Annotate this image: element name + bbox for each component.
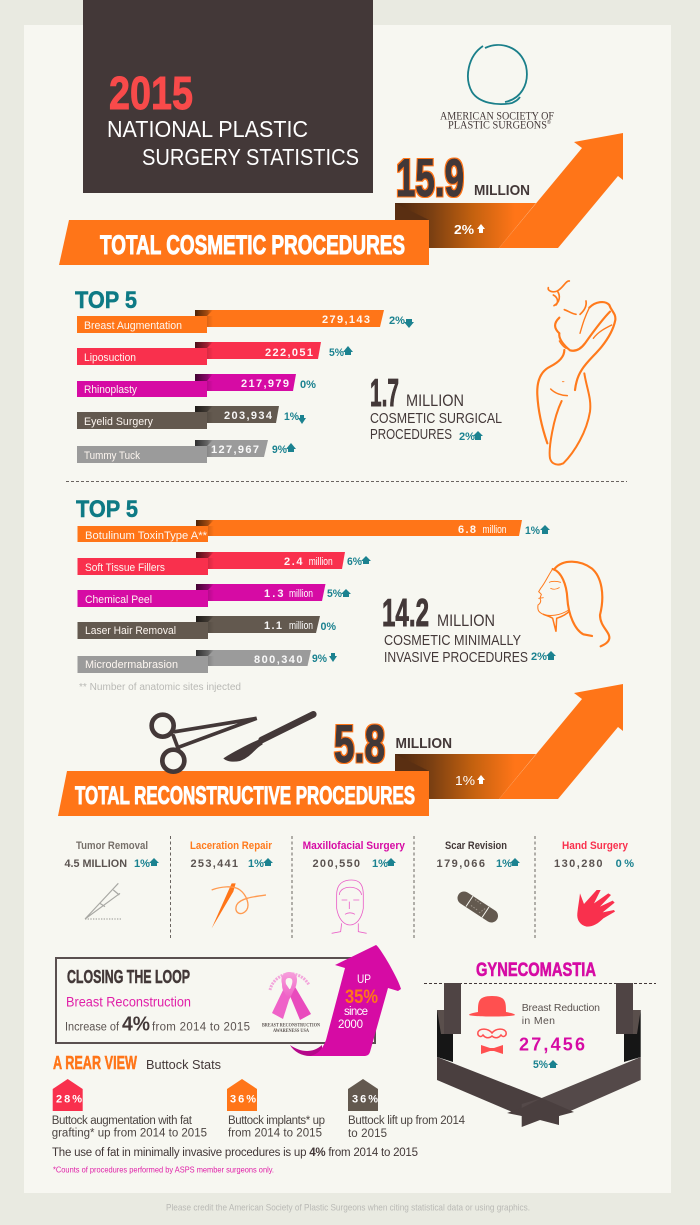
title block: SURGERY STATISTICS xyxy=(142,144,359,170)
total reconstructive arrow and banner: TOTAL RECONSTRUCTIVE PROCEDURES xyxy=(75,782,415,810)
stat: buttock implants: Buttock implants* up xyxy=(228,1115,325,1127)
icon: scalpel outline xyxy=(85,883,122,919)
bar: liposuction: Liposuction xyxy=(84,352,136,364)
stat: buttock implants xyxy=(227,1079,325,1140)
icon: face outline xyxy=(332,880,367,933)
column: maxillofacial surgery: 200,550 xyxy=(312,858,360,870)
icon: red hand xyxy=(577,890,615,927)
bar: chemical peel: 1.3 xyxy=(264,588,284,600)
heading: a rear view: Buttock Stats xyxy=(146,1057,221,1072)
stat: 14.2 million minimally invasive: INVASIVE PROCEDURES xyxy=(384,649,528,666)
column: scar revision: 1% xyxy=(496,858,512,870)
column: maxillofacial surgery: Maxillofacial Surgery xyxy=(303,840,406,852)
bar: soft tissue fillers: Soft Tissue Fillers xyxy=(85,562,165,574)
stat: 1.7 million surgical xyxy=(370,372,502,443)
logo: American Society of Plastic Surgeons: AMERICAN SOCIETY OF xyxy=(440,110,554,122)
stat: buttock lift: to 2015 xyxy=(348,1128,387,1140)
total reconstructive arrow and banner: 5.8 xyxy=(334,715,385,774)
stat: 1.7 million surgical: COSMETIC SURGICAL xyxy=(370,410,502,427)
column: hand surgery: 130,280 xyxy=(554,858,602,870)
footnote: anatomic sites: ** Number of anatomic sites injected xyxy=(79,682,241,693)
column: laceration repair: 1% xyxy=(248,858,264,870)
panel: closing the loop: CLOSING THE LOOP xyxy=(67,967,190,987)
panel: gynecomastia: 5% xyxy=(533,1059,548,1071)
bar: laser hair removal xyxy=(78,616,336,639)
bar: laser hair removal: 0% xyxy=(320,621,336,633)
bar: eyelid surgery: 203,934 xyxy=(224,410,273,422)
bar: eyelid surgery: 1% xyxy=(284,411,299,423)
column: maxillofacial surgery: 1% xyxy=(372,858,388,870)
stat: 14.2 million minimally invasive xyxy=(382,592,556,666)
column: hand surgery: Hand Surgery xyxy=(562,840,629,852)
column: maxillofacial surgery xyxy=(303,840,406,933)
logo: American Society of Plastic Surgeons xyxy=(440,45,554,132)
icon: scalpel xyxy=(223,714,313,762)
bar: liposuction: 5% xyxy=(329,347,344,359)
stat: 1.7 million surgical: PROCEDURES xyxy=(370,426,452,443)
column: tumor removal: 1% xyxy=(134,858,150,870)
total reconstructive arrow and banner: MILLION xyxy=(396,735,452,752)
bar: eyelid surgery xyxy=(77,406,306,429)
column: hand surgery xyxy=(554,840,634,927)
stat: 1.7 million surgical: 2% xyxy=(459,431,475,443)
panel: closing the loop: Increase of xyxy=(65,1022,120,1034)
panel: gynecomastia xyxy=(424,960,656,1127)
panel: gynecomastia: 27,456 xyxy=(519,1035,585,1055)
total cosmetic arrow and banner: TOTAL COSMETIC PROCEDURES xyxy=(100,230,405,260)
stat: buttock implants: 36% xyxy=(230,1094,256,1106)
bar: tummy tuck: 9% xyxy=(272,444,287,456)
text: use of fat: The use of fat in minimally invasive procedures is up 4% from 2014 to 2015 xyxy=(52,1147,418,1159)
stat: buttock augmentation: grafting* up from 2014 to 2015 xyxy=(52,1128,207,1140)
bar: eyelid surgery: Eyelid Surgery xyxy=(84,416,153,428)
column: laceration repair xyxy=(190,840,273,928)
heading: top 5 minimally invasive: TOP 5 xyxy=(76,496,138,523)
icon: bow tie xyxy=(481,1045,503,1054)
stat: 1.7 million surgical: 1.7 xyxy=(370,372,399,415)
column: tumor removal xyxy=(64,840,159,919)
panel: gynecomastia: GYNECOMASTIA xyxy=(476,960,596,981)
pink arrow: up 35% since 2000: UP xyxy=(357,972,371,986)
panel: closing the loop: from 2014 to 2015 xyxy=(152,1022,250,1034)
bar: microdermabrasion: Microdermabrasion xyxy=(85,659,178,671)
total cosmetic arrow and banner: 15.9 xyxy=(396,149,464,208)
pink arrow: up 35% since 2000: 35% xyxy=(345,987,378,1008)
bar: rhinoplasty: 217,979 xyxy=(241,378,289,390)
bar: botulinum toxin: 6.8 xyxy=(458,524,476,536)
bar: laser hair removal: 1.1 xyxy=(264,620,282,632)
bar: rhinoplasty: Rhinoplasty xyxy=(84,384,137,396)
title block: NATIONAL PLASTIC xyxy=(107,116,308,142)
stat: 14.2 million minimally invasive: 14.2 xyxy=(382,592,429,635)
stat: 1.7 million surgical: MILLION xyxy=(406,391,464,410)
bar: laser hair removal: million xyxy=(289,620,313,632)
illustration: female face outline xyxy=(538,562,609,646)
panel: closing the loop: BREAST RECONSTRUCTION xyxy=(262,1024,320,1029)
footnote: counts of procedures: *Counts of procedures performed by ASPS member surgeons only. xyxy=(53,1165,274,1175)
stat: buttock augmentation: Buttock augmentation with fat xyxy=(52,1115,193,1127)
pink arrow: up 35% since 2000 xyxy=(290,945,401,1056)
bar: soft tissue fillers: million xyxy=(309,556,333,568)
bar: botulinum toxin: million xyxy=(482,524,506,536)
icon: needle and thread xyxy=(212,883,266,928)
icon: red hat xyxy=(469,996,515,1016)
bar: breast augmentation: 279,143 xyxy=(322,314,370,326)
bar: liposuction: 222,051 xyxy=(265,347,313,359)
divider xyxy=(66,480,627,482)
column: laceration repair: 253,441 xyxy=(190,858,238,870)
bar: liposuction xyxy=(77,342,353,365)
panel: closing the loop: Breast Reconstruction xyxy=(66,994,191,1010)
total reconstructive arrow and banner xyxy=(58,684,623,816)
total cosmetic arrow and banner: MILLION xyxy=(474,182,530,199)
stat: 14.2 million minimally invasive: 2% xyxy=(531,651,547,663)
total reconstructive arrow and banner: 1% xyxy=(455,773,475,788)
icon: hemostat scissors xyxy=(152,715,257,772)
heading: a rear view: A REAR VIEW xyxy=(53,1053,137,1073)
ribbon frame xyxy=(437,983,641,1127)
bar: microdermabrasion: 9% xyxy=(312,653,327,665)
total cosmetic arrow and banner xyxy=(59,133,623,265)
credit line: Please credit the American Society of Plastic Surgeons when citing statistical data or using graphics. xyxy=(166,1202,530,1214)
bar: botulinum toxin xyxy=(78,520,550,542)
illustration: female body outline xyxy=(537,281,615,465)
bar: microdermabrasion xyxy=(78,650,337,673)
bar: soft tissue fillers: 2.4 xyxy=(284,556,303,568)
bar: rhinoplasty xyxy=(77,374,316,397)
column: tumor removal: 4.5 MILLION xyxy=(64,858,127,870)
bar: rhinoplasty: 0% xyxy=(300,379,316,391)
bar: breast augmentation: Breast Augmentation xyxy=(84,320,182,332)
stat: buttock implants: from 2014 to 2015 xyxy=(228,1128,322,1140)
panel: closing the loop: AWARENESS USA xyxy=(273,1029,309,1034)
icon: moustache xyxy=(478,1029,506,1038)
column: scar revision xyxy=(436,840,520,918)
bar: tummy tuck: 127,967 xyxy=(211,444,259,456)
bar: tummy tuck xyxy=(77,440,296,463)
stat: buttock lift xyxy=(348,1079,466,1140)
stat: 14.2 million minimally invasive: COSMETIC MINIMALLY xyxy=(384,632,521,649)
stat: buttock lift: 36% xyxy=(352,1094,378,1106)
title block xyxy=(83,0,373,193)
bar: microdermabrasion: 800,340 xyxy=(254,654,302,666)
column dividers xyxy=(170,836,535,938)
stat: buttock lift: Buttock lift up from 2014 xyxy=(348,1115,466,1127)
bar: laser hair removal: Laser Hair Removal xyxy=(85,625,176,637)
bar: chemical peel xyxy=(78,584,351,607)
bar: soft tissue fillers xyxy=(78,552,371,575)
panel: closing the loop xyxy=(56,958,375,1043)
pink arrow: up 35% since 2000: since xyxy=(344,1006,368,1018)
bar: chemical peel: million xyxy=(289,588,313,600)
heading: top 5 surgical: TOP 5 xyxy=(75,287,137,314)
stat: 14.2 million minimally invasive: MILLION xyxy=(437,611,495,630)
logo: American Society of Plastic Surgeons: ® xyxy=(547,119,551,126)
bar: botulinum toxin: 1% xyxy=(525,525,540,537)
bar: soft tissue fillers: 6% xyxy=(347,556,362,568)
stat: buttock augmentation: 28% xyxy=(56,1094,82,1106)
bar: breast augmentation: 2% xyxy=(389,315,405,327)
bar: tummy tuck: Tummy Tuck xyxy=(84,450,140,462)
bar: breast augmentation xyxy=(77,310,414,333)
bar: chemical peel: 5% xyxy=(327,588,342,600)
panel: gynecomastia: in Men xyxy=(522,1015,555,1027)
total cosmetic arrow and banner: 2% xyxy=(454,222,474,237)
icon: pink awareness ribbon xyxy=(270,972,311,1020)
icon: bandage xyxy=(464,896,492,918)
column: scar revision: Scar Revision xyxy=(445,840,507,852)
column: tumor removal: Tumor Removal xyxy=(76,840,148,852)
pink arrow: up 35% since 2000: 2000 xyxy=(338,1019,363,1031)
logo: American Society of Plastic Surgeons: PLASTIC SURGEONS xyxy=(448,120,547,132)
panel: gynecomastia: Breast Reduction xyxy=(522,1002,600,1014)
column: scar revision: 179,066 xyxy=(436,858,485,870)
bar: chemical peel: Chemical Peel xyxy=(85,594,152,606)
stat: buttock augmentation xyxy=(52,1079,207,1140)
column: laceration repair: Laceration Repair xyxy=(190,840,273,852)
panel: closing the loop: 4% xyxy=(122,1014,150,1036)
column: hand surgery: 0 % xyxy=(616,858,634,870)
bar: botulinum toxin: Botulinum ToxinType A** xyxy=(85,530,208,542)
title block: 2015 xyxy=(109,67,193,119)
